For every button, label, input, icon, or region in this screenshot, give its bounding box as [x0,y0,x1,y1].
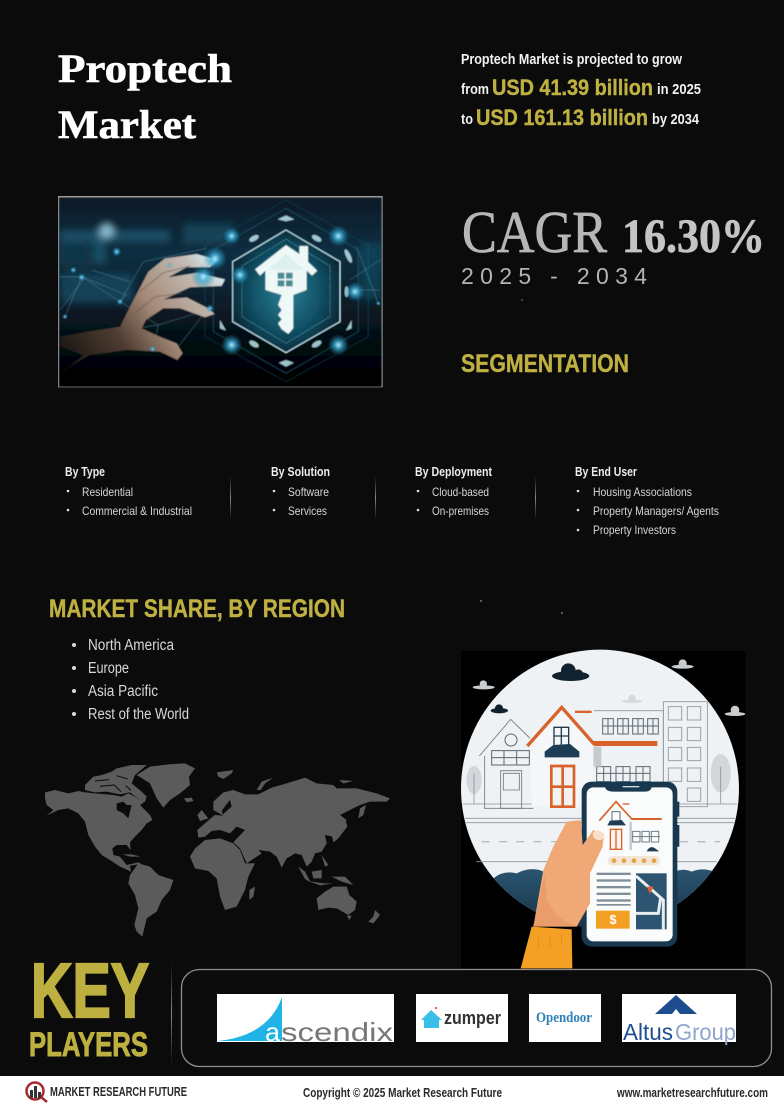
hero image: hand and digital house key [58,196,383,387]
phone: $ [609,913,617,927]
logo: ascendix [217,994,394,1047]
CAGR figure: 2025 - 2034 [461,263,647,289]
hexagon rings [205,200,368,382]
region list: Europe [88,660,129,677]
segmentation: by deployment [415,464,493,518]
logo: zumper: zumper [444,1008,501,1028]
footer: Copyright © 2025 Market Research Future [303,1085,502,1100]
map: Americas and Greenland [45,763,195,937]
segmentation heading: SEGMENTATION [461,350,629,378]
segmentation: by end user: Property Investors [593,523,676,537]
market projection text [461,51,701,130]
footer: MARKET RESEARCH FUTURE [50,1084,187,1099]
key players heading [29,948,149,1064]
clouds [473,659,745,716]
logo: zumper [416,994,508,1042]
region list: North America [88,637,174,654]
region list: Asia Pacific [88,683,158,700]
segmentation: by solution [271,464,330,518]
segmentation: by solution: By Solution [271,464,330,479]
title [58,46,232,147]
market projection text: USD 161.13 billion [476,105,648,130]
network lines [60,247,380,348]
map: Eurasia, Africa and Oceania [190,770,390,923]
glowing nodes [62,225,381,356]
segmentation: by deployment: On-premises [432,504,489,518]
market projection text: USD 41.39 billion [492,75,653,100]
segmentation: by solution: Software [288,485,329,499]
segmentation: by type [65,464,192,518]
market projection text: Proptech Market is projected to grow [461,51,682,68]
logo: altus group [622,994,736,1045]
market share heading: MARKET SHARE, BY REGION [49,595,345,623]
trees and ground [463,754,737,862]
title: Market [58,102,197,147]
CAGR figure: 16.30% [622,210,765,263]
phone [582,782,679,947]
logo: altus group: Group [675,1019,736,1045]
logo: altus group: Altus [623,1019,673,1045]
market projection text: in 2025 [657,81,701,98]
house key [255,245,317,334]
bushes at base of circle [494,869,712,926]
title: Proptech [58,46,232,91]
segmentation: by solution: Services [288,504,327,518]
segmentation: by end user: By End User [575,464,637,479]
market projection text: by 2034 [652,111,700,128]
logo: ascendix: scendix [281,1017,393,1047]
segmentation: by end user [575,464,719,537]
segmentation: by deployment: By Deployment [415,464,493,479]
market projection text: from [461,81,489,98]
phone and houses illustration [457,650,745,968]
CAGR figure: CAGR [462,199,608,265]
segmentation: by deployment: Cloud-based [432,485,489,499]
logo: ascendix: a [265,1017,281,1047]
market projection text: to [461,111,473,128]
segmentation: by end user: Housing Associations [593,485,692,499]
segmentation: by type: Residential [82,485,133,499]
hand holding phone [521,820,605,968]
logo: opendoor [529,994,601,1042]
key players panel [182,970,772,1066]
footer [0,1076,784,1108]
region list: Rest of the World [88,706,189,723]
hand [59,254,225,375]
segmentation: by type: Commercial & Industrial [82,504,192,518]
CAGR figure [461,199,765,289]
footer logo [26,1082,47,1102]
world map [45,763,390,937]
key players heading: PLAYERS [29,1026,148,1064]
segmentation: by type: By Type [65,464,105,479]
orange house [527,707,594,807]
left house [479,719,533,808]
key players heading: KEY [31,948,149,1034]
segmentation: by end user: Property Managers/ Agents [593,504,719,518]
logo: opendoor: Opendoor [536,1010,593,1026]
region list [72,637,189,723]
apartment blocks [593,702,707,807]
